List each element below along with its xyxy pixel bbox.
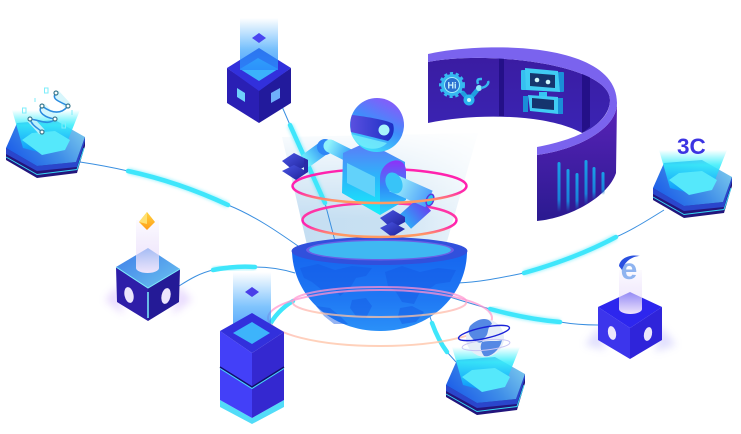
robot head: [350, 98, 404, 152]
cube diamond: [252, 33, 266, 43]
screen front wall: [537, 103, 617, 221]
cube top: [598, 292, 662, 328]
icon: robot: [521, 68, 564, 114]
screen back wall: [428, 58, 610, 133]
robot left arm: [307, 139, 348, 160]
cube top: [227, 48, 291, 91]
node: DNA hexagon: [6, 88, 85, 178]
tower base light: [220, 400, 284, 424]
tower diamond: [245, 287, 259, 297]
robot torso: [342, 142, 405, 215]
robot left claw: [282, 153, 308, 180]
node: tower: [220, 272, 284, 424]
tower top: [220, 313, 284, 353]
middle ring front: [302, 220, 456, 237]
lower ring: [292, 287, 466, 317]
connector lines: [80, 95, 664, 362]
light beam above bowl: [282, 138, 468, 244]
connector: right cube to bowl: [450, 297, 598, 325]
label: 3C: 3C: [677, 134, 706, 159]
robot right claw: [380, 210, 405, 237]
icon: gear and robotic arm: [441, 74, 488, 106]
icon: world hemisphere bowl: [292, 237, 468, 331]
cube glow: [105, 285, 192, 315]
tower beam: [233, 272, 271, 330]
bowl world map: [300, 264, 456, 324]
robot side panel: [380, 160, 406, 215]
node: right cube: [585, 253, 676, 359]
node: top cube: [227, 18, 291, 123]
cube top: [116, 248, 180, 288]
bottom ring: [268, 290, 492, 346]
icon: gold diamond: [139, 212, 155, 230]
screen rim: [428, 47, 617, 155]
connector: globe node to bowl: [427, 307, 456, 362]
cube windows: [237, 88, 245, 102]
icon: browser e: e: [621, 253, 637, 286]
icon: DNA helix: [22, 88, 72, 134]
node: 3C hexagon: [653, 134, 732, 218]
bowl rim: [292, 237, 468, 265]
screen dividers: [499, 55, 590, 133]
robot chest plate: [347, 163, 375, 197]
connector: DNA node to bowl: [80, 162, 298, 246]
cube beam: [240, 18, 278, 70]
cube glow: [585, 325, 676, 352]
robot right arm: [382, 170, 435, 222]
tower body: [220, 331, 252, 418]
upper ring back: [292, 169, 466, 186]
robot: [282, 98, 435, 237]
icon: gear and robotic arm: Hi: [448, 80, 456, 90]
connector: gold cube to bowl: [179, 267, 295, 286]
upper ring front: [292, 186, 466, 203]
connector: tower to ring: [268, 301, 293, 328]
node: globe hexagon: [446, 319, 525, 415]
light tube: [619, 270, 642, 314]
curved screen panel: [428, 47, 617, 221]
icon: globe: [457, 319, 511, 357]
middle ring back: [302, 203, 456, 220]
cube holes: [607, 325, 617, 341]
cube body: [116, 267, 148, 321]
bowl inner surface: [309, 241, 451, 259]
node: gold cube: [105, 212, 192, 321]
connector: 3C node to bowl: [458, 210, 664, 283]
bar chart: [558, 160, 604, 212]
bowl body: [292, 251, 467, 331]
tower seam: [220, 367, 284, 387]
connector: top cube to bowl: [277, 95, 335, 241]
cube body: [598, 307, 630, 359]
light tube: [136, 220, 159, 273]
cube holes: [123, 286, 135, 304]
cube body: [227, 68, 259, 123]
